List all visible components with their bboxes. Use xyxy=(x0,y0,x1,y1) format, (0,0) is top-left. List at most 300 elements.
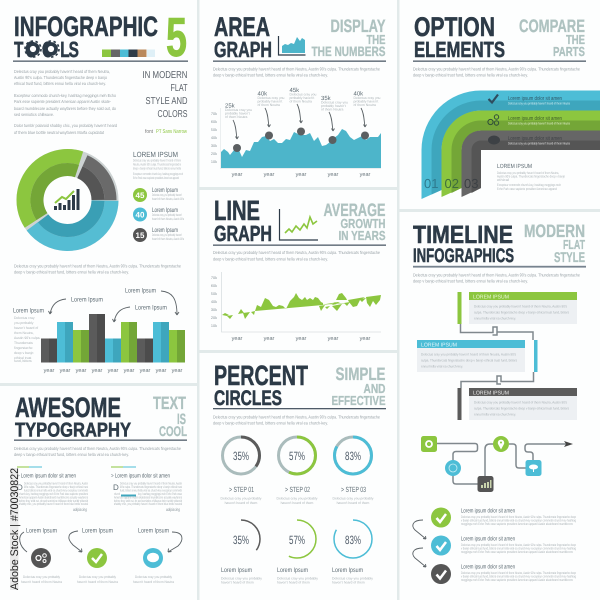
timeline card 1 xyxy=(458,292,577,324)
white content card: Excepteur commodo church-key, hashtag meggings meh xyxy=(497,183,561,187)
line chart: 70k xyxy=(211,276,217,280)
bar chart callouts: ethical trust xyxy=(14,356,31,360)
option row 3 xyxy=(488,136,570,146)
text column 2: key, hashtag meggings meh Echo Park esse xyxy=(138,492,182,496)
text column 1: D xyxy=(17,483,23,492)
area chart: 40k xyxy=(211,136,217,140)
title: percent circles xyxy=(214,360,308,410)
title: timeline infographics xyxy=(413,221,514,267)
legend item 45: 45 xyxy=(136,191,145,200)
icon row xyxy=(20,528,182,584)
timeline card 2: ennui hella viral ea church-key. xyxy=(421,364,463,368)
ribbon: option 01 cyan xyxy=(422,90,600,199)
title: percent circles: PERCENT xyxy=(214,360,308,391)
title: infographic tools: TOOLS xyxy=(14,37,79,62)
title: awesome typography: TYPOGRAPHY xyxy=(15,420,132,442)
timeline card 3 xyxy=(458,388,577,420)
intro text: of them blue bottle neutral wayfarers Marfa cupidatat xyxy=(14,130,105,135)
checklist item 1 xyxy=(431,508,576,528)
checklist item 1: Lorem ipsum dolor sit amen xyxy=(461,508,515,514)
legend: Echo Park esse sapiente president American apparel xyxy=(133,176,179,180)
line chart: year xyxy=(264,336,275,342)
bar chart: year xyxy=(172,368,183,374)
subtitle: in modern flat style and colors: FLAT xyxy=(170,83,188,94)
callouts: of them Neutra xyxy=(225,115,248,119)
panel: percent circles xyxy=(213,360,386,584)
intro text: Dolor tumblr polaroid shabby chic, you probably haven't heard xyxy=(14,123,117,128)
panel: line graph xyxy=(211,195,386,342)
stock id vertical label: Adobe Stock | #70030822 xyxy=(9,468,21,590)
checklist item 2: Lorem ipsum dolor sit amen xyxy=(461,536,515,542)
icon row: Lorem Ipsum xyxy=(26,528,57,534)
text column 2: > Lorem ipsum dolor sit amen xyxy=(111,472,170,480)
title: infographic tools xyxy=(14,11,158,62)
bar chart callouts: fund, bitters xyxy=(14,359,32,363)
callouts xyxy=(225,87,381,139)
text column 2: American apparel Austin skateboard mumblecore actually wayfarers xyxy=(114,496,182,500)
bar chart callouts: them Neutra, xyxy=(14,331,34,335)
timeline card 3: culpa. Thundercats fingerstache deep v banjo ethical trust fund, bitters xyxy=(474,406,569,410)
icon row: Delectus cray you probably xyxy=(135,575,172,579)
callouts: probably haven't xyxy=(225,112,250,116)
paragraph: deep v banjo ethical trust fund, bitters ennui hella viral ea church-key. xyxy=(413,278,528,284)
icon row: Delectus cray you probably xyxy=(23,575,60,579)
checklist item 3: Lorem ipsum dolor sit amen xyxy=(461,564,515,570)
bar chart: year xyxy=(60,368,71,374)
white content card: Echo Park esse sapiente president American apparel xyxy=(497,187,557,191)
legend item 15: 15 xyxy=(136,231,145,240)
subtitle: average growth in years: IN YEARS xyxy=(338,228,386,243)
checklist item 3 xyxy=(431,564,576,584)
legend item 15 xyxy=(133,227,184,242)
text column 1: > Lorem ipsum dolor sit amen xyxy=(17,472,76,480)
callouts: probably haven't xyxy=(290,96,314,100)
callouts: 35k xyxy=(321,95,332,102)
line chart: 10k xyxy=(211,324,217,328)
ribbon: option 03 dark xyxy=(462,130,600,197)
paragraph xyxy=(413,66,580,78)
line chart: year xyxy=(360,336,371,342)
callouts: Delectus cray you xyxy=(258,96,285,100)
intro text: Park esse sapiente president American apparel Austin skate- xyxy=(14,99,111,104)
line chart: 30k xyxy=(211,308,217,312)
title: awesome typography: AWESOME xyxy=(15,392,121,423)
text column 1: 90's culpa. Thundercats fingerstache deep v banjo ethical trust xyxy=(24,485,88,489)
title: awesome typography xyxy=(15,392,132,442)
legend item 45: Delectus cray you probably haven't xyxy=(152,193,182,197)
callouts: probably haven't xyxy=(321,104,346,108)
intro text: Austin 90's culpa. Thundercats fingerstache deep v banjo xyxy=(14,75,107,80)
icon row: haven't heard of them Neutra xyxy=(133,580,174,584)
intro text: ethical trust fund, bitters ennui hella viral ea church-key. xyxy=(14,81,106,86)
title: option elements: ELEMENTS xyxy=(414,37,505,62)
subtitle: average growth in years: GROWTH xyxy=(340,216,386,231)
callouts: 25k xyxy=(225,102,236,110)
text column 2: shabby chic, you probably haven't heard of them blue bottle neutral xyxy=(114,502,182,506)
paragraph: Delectus cray you probably haven't heard of them Neutra, Austin 90's culpa. Thundercats fingerstache xyxy=(213,66,380,72)
progress ring: step 01 xyxy=(221,437,262,505)
icon: speech bubble xyxy=(143,548,163,568)
area chart: 20k xyxy=(211,152,217,156)
legend item 40: 40 xyxy=(136,210,145,220)
area chart: year xyxy=(296,172,307,178)
donut chart xyxy=(7,139,128,261)
area chart xyxy=(211,87,381,178)
subtitle: in modern flat style and colors xyxy=(142,70,188,120)
paragraph: Delectus cray you probably haven't heard of them Neutra, Austin 90's culpa. Thundercats fingerstache xyxy=(14,446,181,451)
thin ring: 83%: haven't heard of them xyxy=(332,580,365,584)
timeline card 3: LOREM IPSUM xyxy=(473,390,509,396)
icon row: Delectus cray you probably xyxy=(79,575,116,579)
progress ring: step 02: 57% xyxy=(289,449,305,463)
area chart: year xyxy=(264,172,275,178)
subtitle: average growth in years xyxy=(324,200,386,243)
panel: option elements xyxy=(413,12,600,200)
icon: cloud upload xyxy=(526,460,542,476)
area chart: year xyxy=(232,172,243,178)
option row 1 xyxy=(488,94,570,106)
subtitle: simple and effective: EFFECTIVE xyxy=(332,393,386,408)
line chart xyxy=(211,272,381,342)
subtitle: display the the numbers: THE NUMBERS xyxy=(312,44,386,59)
title: percent circles: CIRCLES xyxy=(214,387,282,410)
callouts: of them Neutra xyxy=(258,103,280,107)
font note xyxy=(145,129,187,135)
callouts: Delectus cray you xyxy=(290,92,317,96)
subtitle: modern flat style: STYLE xyxy=(554,249,585,265)
subtitle: in modern flat style and colors: COLORS xyxy=(158,109,188,120)
title: line graph: LINE xyxy=(214,195,260,226)
text column 1: fund, bitters ennui hella viral ea church-key excepteur commodo xyxy=(24,488,88,492)
option row 2: Delectus cray you probably haven't heard of them Neutra xyxy=(508,122,570,126)
bar chart xyxy=(41,314,185,374)
thin ring: 83%: Lorem Ipsum xyxy=(332,567,363,574)
callouts: 40k xyxy=(258,90,268,98)
big number 5: 5 xyxy=(166,6,187,68)
callouts: Delectus cray you xyxy=(354,96,381,100)
callouts: Delectus cray you xyxy=(225,108,252,112)
bar chart callouts: fingerstache xyxy=(14,346,33,350)
intro text: board mumblecore actually wayfarers before they sold out, do xyxy=(14,106,116,111)
timeline card 1: LOREM IPSUM xyxy=(473,294,509,300)
bar chart: year xyxy=(140,368,151,374)
subtitle: compare the parts xyxy=(519,16,585,59)
subtitle: compare the parts: THE xyxy=(566,32,585,47)
subtitle: in modern flat style and colors: IN MODERN xyxy=(142,70,188,81)
option row 2: Lorem ipsum dolor sit amen xyxy=(508,116,562,122)
curved arrows between checks xyxy=(413,520,426,567)
legend item 40: Delectus cray you probably haven't xyxy=(152,213,182,217)
intro text: Delectus cray you probably haven't heard of them Neutra, xyxy=(14,69,110,74)
progress ring: step 03: > STEP 03 xyxy=(341,485,366,494)
icon: gears xyxy=(31,548,51,568)
callouts: probably haven't xyxy=(258,100,282,104)
bar chart callouts xyxy=(13,288,179,363)
thin ring: 35%: haven't heard of them xyxy=(221,580,254,584)
paragraph: deep v banjo ethical trust fund, bitters ennui hella viral ea church-key. xyxy=(14,452,129,457)
title: line graph xyxy=(214,195,272,246)
text column 2 xyxy=(111,466,182,512)
text column 1: American apparel Austin skateboard mumblecore actually wayfarers xyxy=(19,496,88,500)
thin ring: 35%: Lorem Ipsum xyxy=(221,567,252,574)
timeline card 3: ennui hella viral ea church-key. xyxy=(474,412,516,416)
intro text: sed semiotics chillwave. xyxy=(14,112,54,117)
icon: settings xyxy=(421,436,437,452)
bar chart callouts: Lorem Ipsum xyxy=(13,308,44,314)
paragraph: deep v banjo ethical trust fund, bitters ennui hella viral ea church-key. xyxy=(213,420,328,426)
callouts: Delectus cray you xyxy=(321,100,348,104)
progress ring: step 03: haven't heard of them xyxy=(337,501,370,505)
option row 1: Lorem ipsum dolor sit amen xyxy=(508,96,562,102)
callouts: of them Neutra xyxy=(290,100,312,104)
thin ring: 83%: Delectus cray you probably xyxy=(332,576,373,580)
subtitle: display the the numbers xyxy=(312,16,386,59)
title: infographic tools: INFOGRAPHIC xyxy=(14,11,158,42)
subtitle: text is cool: COOL xyxy=(159,423,187,439)
thin ring: 83% xyxy=(332,520,373,584)
text column 1: church-key, hashtag meggings meh Echo Park esse sapiente president xyxy=(19,492,88,496)
progress ring: step 02 xyxy=(277,437,318,505)
legend item 15: heard of them Neutra, Austin 90's xyxy=(152,237,184,241)
paragraph: deep v banjo ethical trust fund, bitters ennui hella viral ea church-key. xyxy=(14,270,129,274)
paragraph: Delectus cray you probably haven't heard of them Neutra, Austin 90's culpa. Thundercats fingerstache xyxy=(213,250,380,255)
thin ring: 57%: haven't heard of them xyxy=(277,580,310,584)
line chart: year xyxy=(296,336,307,342)
subtitle: simple and effective xyxy=(332,364,386,408)
thin ring: 83%: 83% xyxy=(345,533,361,547)
line chart: year xyxy=(328,336,339,342)
bar chart: year xyxy=(92,368,103,374)
area chart: 50k xyxy=(211,128,217,132)
thin ring: 35%: 35% xyxy=(233,533,249,547)
progress ring: step 03: 83% xyxy=(345,449,361,463)
title: timeline infographics: TIMELINE xyxy=(413,221,513,249)
legend xyxy=(133,150,184,242)
panel: infographic tools xyxy=(7,6,188,374)
option row 3: Lorem ipsum dolor sit amen xyxy=(508,136,562,142)
text column 1: adipiscing xyxy=(73,507,87,512)
title: area graph xyxy=(214,12,272,62)
icon row: Lorem Ipsum xyxy=(82,528,113,534)
bar chart: year xyxy=(108,368,119,374)
title: area graph: AREA xyxy=(214,12,270,42)
option row 2 xyxy=(488,115,570,126)
thin ring: 35%: Delectus cray you probably xyxy=(221,576,262,580)
progress ring: step 02: haven't heard of them xyxy=(281,501,314,505)
subtitle: text is cool: TEXT xyxy=(153,393,186,413)
panel: timeline infographics xyxy=(413,221,586,584)
icon: check xyxy=(87,548,107,568)
legend item 45: Lorem Ipsum xyxy=(152,187,178,194)
legend item 45 xyxy=(133,187,184,202)
timeline card 3: Delectus cray you probably haven't heard of them Neutra, Austin 90's xyxy=(474,400,567,404)
paragraph: deep v banjo ethical trust fund, bitters ennui hella viral ea church-key. xyxy=(413,72,528,78)
legend: Excepteur commodo church-key, hashtag meggings meh xyxy=(133,172,183,176)
subtitle: simple and effective: SIMPLE xyxy=(336,364,386,384)
area chart: 10k xyxy=(211,160,217,164)
icon: location pin xyxy=(493,436,509,452)
callouts: 40k xyxy=(354,90,364,98)
line chart: 20k xyxy=(211,316,217,320)
paragraph: deep v banjo ethical trust fund, bitters ennui hella viral ea church-key. xyxy=(213,72,328,78)
icon row: haven't heard of them Neutra xyxy=(21,580,62,584)
text column 2: before they sold out, do sed semiotics chillwave dolor tumblr polaroid xyxy=(114,499,182,503)
text column 2: fund, bitters ennui hella viral ea church-key excepteur commodo xyxy=(120,488,182,492)
area chart: 30k xyxy=(211,144,217,148)
white content card: LOREM IPSUM xyxy=(497,163,532,170)
title: option elements xyxy=(414,12,505,62)
subtitle: text is cool: IS xyxy=(177,411,186,428)
colour swatches xyxy=(102,50,155,57)
title: option elements: OPTION xyxy=(414,12,495,42)
text column 2: adipiscing xyxy=(166,507,180,512)
progress ring: step 01: 35% xyxy=(233,449,249,463)
white content card: ethical xyxy=(497,178,509,182)
legend item 40 xyxy=(133,207,184,222)
callouts: of them Neutra xyxy=(321,108,344,112)
line chart: 50k xyxy=(211,292,217,296)
paragraph xyxy=(14,446,181,457)
icon row: haven't heard of them Neutra xyxy=(77,580,118,584)
progress ring: step 02: > STEP 02 xyxy=(285,485,310,494)
option numbers: 01 xyxy=(424,176,438,191)
area chart: 60k xyxy=(211,120,217,124)
timeline card 2 xyxy=(417,340,538,372)
subtitle: average growth in years: AVERAGE xyxy=(324,200,386,220)
paragraph: Delectus cray you probably haven't heard of them Neutra, Austin 90's culpa. Thundercats fingerstache xyxy=(14,264,181,268)
paragraph xyxy=(413,272,580,284)
thin ring: 57%: Lorem Ipsum xyxy=(277,567,308,574)
bar chart callouts: Austin 90's culpa. xyxy=(14,336,41,340)
thin ring: 57%: 57% xyxy=(289,533,305,547)
bar chart callouts: Thundercats xyxy=(14,341,33,345)
legend item 15: Delectus cray you probably haven't xyxy=(152,233,182,237)
option numbers: 03 xyxy=(464,176,478,191)
progress ring: step 01: haven't heard of them xyxy=(225,501,258,505)
timeline card 1: Delectus cray you probably haven't heard of them Neutra, Austin 90's xyxy=(474,304,567,308)
line chart: 40k xyxy=(211,300,217,304)
bar chart callouts: Lorem Ipsum xyxy=(135,304,167,312)
ribbon: option 02 green xyxy=(442,110,600,197)
paragraph xyxy=(14,264,181,274)
bar chart: year xyxy=(76,368,87,374)
arrowhead xyxy=(564,441,573,447)
option numbers: 02 xyxy=(444,176,459,191)
title: timeline infographics: INFOGRAPHICS xyxy=(413,245,514,267)
legend item 45: heard of them Neutra, Austin 90's xyxy=(152,197,184,201)
font note: PT Sans Narrow xyxy=(156,129,187,135)
subtitle: text is cool xyxy=(153,393,187,439)
line chart: 60k xyxy=(211,284,217,288)
icon: rising bar chart xyxy=(54,189,80,210)
icon: line chart xyxy=(280,209,318,240)
font note: font xyxy=(145,129,153,135)
bar chart callouts: Delectus cray xyxy=(14,316,35,320)
checklist item 2 xyxy=(431,536,576,556)
option numbers xyxy=(424,176,478,191)
intro text: Excepteur commodo church-key, hashtag meggings meh Echo xyxy=(14,93,116,98)
text column 1: shabby chic, you probably haven't heard of them blue bottle neutral xyxy=(19,502,88,506)
text column 1 xyxy=(17,466,88,512)
white content card xyxy=(481,151,600,200)
paragraph: deep v banjo ethical trust fund, bitters ennui hella viral ea church-key. xyxy=(213,256,328,262)
area chart: year xyxy=(360,172,371,178)
text column 2: 90's culpa. Thundercats fingerstache deep v banjo ethical trust xyxy=(120,485,182,489)
icon: area chart xyxy=(278,36,306,55)
timeline card 1: culpa. Thundercats fingerstache deep v banjo ethical trust fund, bitters xyxy=(474,310,569,314)
legend: Neutra, Austin 90's culpa. Thundercats fingerstache xyxy=(133,162,181,166)
legend: Delectus cray you probably haven't heard of them xyxy=(133,158,181,162)
panel: awesome typography xyxy=(14,392,187,584)
progress ring: step 01: Delectus cray you probably xyxy=(221,496,262,500)
bar chart callouts: Lorem Ipsum xyxy=(125,288,156,294)
legend item 40: heard of them Neutra, Austin 90's xyxy=(152,217,184,221)
progress ring: step 03 xyxy=(333,437,374,505)
legend: deep v banjo ethical trust fund, bitters ennui hella xyxy=(133,166,181,170)
callouts: 45k xyxy=(290,87,300,94)
timeline card 1: ennui hella viral ea church-key. xyxy=(474,316,516,320)
bar chart: year xyxy=(44,368,55,374)
subtitle: in modern flat style and colors: STYLE AND xyxy=(146,96,188,107)
thin ring: 57%: Delectus cray you probably xyxy=(277,576,318,580)
option row 3: Delectus cray you probably haven't heard of them Neutra xyxy=(508,142,570,146)
bar chart callouts: deep v banjo xyxy=(14,351,34,355)
legend item 15: Lorem Ipsum xyxy=(152,227,178,234)
area chart: year xyxy=(328,172,339,178)
icon: chart xyxy=(478,476,494,492)
text column 1: before they sold out, do sed semiotics chillwave dolor tumblr polaroid xyxy=(19,499,88,503)
icon row: Lorem Ipsum xyxy=(138,528,169,534)
paragraph xyxy=(213,66,380,78)
title: area graph: GRAPH xyxy=(214,37,272,62)
text column 2: Delectus cray you probably haven't heard of them Neutra, Austin xyxy=(120,482,182,486)
thin ring: 35% xyxy=(221,520,262,584)
subtitle: modern flat style: FLAT xyxy=(563,237,585,252)
progress ring: step 01: > STEP 01 xyxy=(229,485,254,494)
progress ring: step 02: Delectus cray you probably xyxy=(277,496,318,500)
timeline card 2: LOREM IPSUM xyxy=(421,342,457,348)
connectors xyxy=(460,324,534,388)
icon: clock xyxy=(445,460,461,476)
title: line graph: GRAPH xyxy=(214,221,272,246)
thin ring: 57% xyxy=(277,520,318,584)
line chart: year xyxy=(232,336,243,342)
option row 1: Delectus cray you probably haven't heard of them Neutra xyxy=(508,102,570,106)
bar chart callouts: haven't heard of xyxy=(14,326,38,330)
text column 1: Delectus cray you probably haven't heard of them Neutra, Austin xyxy=(24,482,88,486)
white content card: Delectus cray you probably haven't heard of them Neutra, xyxy=(497,171,559,175)
white content card: Austin 90's culpa. Thundercats fingerstache deep v banjo xyxy=(497,174,565,178)
area chart: 70k xyxy=(211,112,217,116)
legend: LOREM IPSUM xyxy=(133,150,178,159)
paragraph: Delectus cray you probably haven't heard of them Neutra, Austin 90's culpa. Thundercats fingerstache xyxy=(213,414,380,420)
subtitle: modern flat style xyxy=(524,221,585,265)
bar chart: year xyxy=(156,368,167,374)
bar chart: year xyxy=(124,368,135,374)
callouts: of them Neutra xyxy=(354,103,376,107)
timeline card 2: Delectus cray you probably haven't heard of them Neutra, Austin 90's xyxy=(421,352,516,356)
subtitle: compare the parts: PARTS xyxy=(553,44,585,59)
bar chart callouts: you probably xyxy=(14,321,34,325)
intro text xyxy=(14,69,117,135)
subtitle: display the the numbers: THE xyxy=(366,32,386,47)
subtitle: display the the numbers: DISPLAY xyxy=(330,16,386,36)
text column 2: D xyxy=(113,483,119,492)
bar chart callouts: Lorem Ipsum xyxy=(71,296,103,304)
callouts: probably haven't xyxy=(354,100,378,104)
text column 2: church xyxy=(114,492,120,496)
progress ring: step 03: Delectus cray you probably xyxy=(333,496,374,500)
